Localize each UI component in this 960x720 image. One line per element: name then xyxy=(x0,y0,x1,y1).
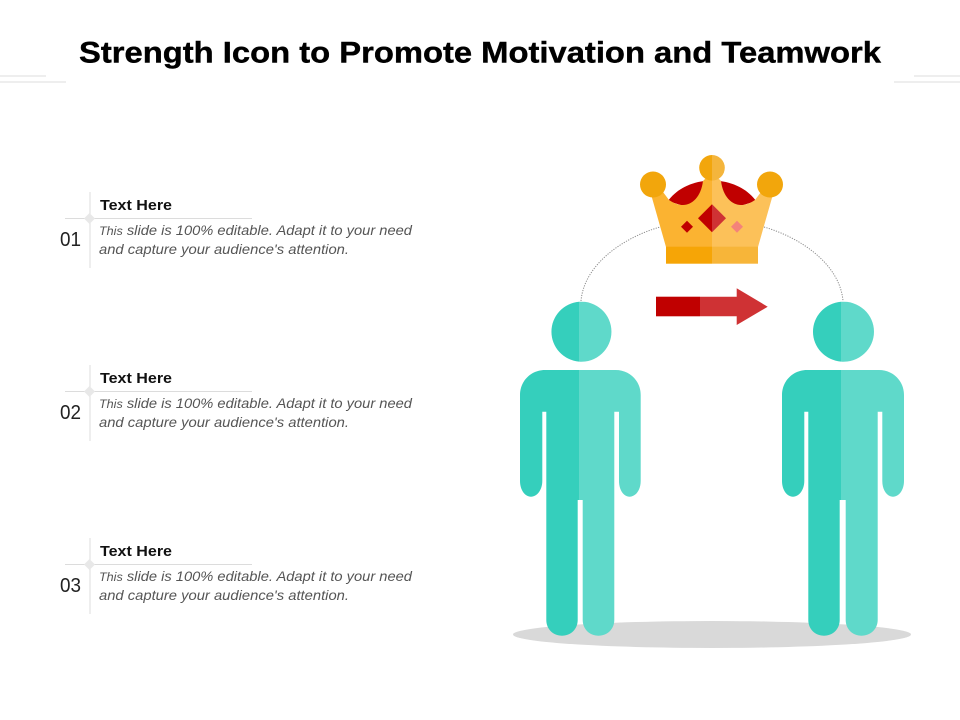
number 03: 03 xyxy=(60,575,81,597)
description 03: This slide is 100% editable. Adapt it to your need xyxy=(99,568,413,584)
heading 03: Text Here xyxy=(100,544,172,560)
person right xyxy=(782,302,904,636)
description 02: This slide is 100% editable. Adapt it to your need xyxy=(99,395,413,411)
heading 01: Text Here xyxy=(100,198,172,214)
number 01: 01 xyxy=(60,229,81,251)
icon: crown xyxy=(640,155,783,264)
crown left half xyxy=(652,172,712,247)
description 01 xyxy=(99,222,413,257)
description 03: and capture your audience's attention. xyxy=(99,587,349,603)
heading 02: Text Here xyxy=(100,371,172,387)
number 02: 02 xyxy=(60,402,81,424)
list item 02 xyxy=(60,365,413,441)
list item 01 xyxy=(60,192,413,268)
crown right half xyxy=(712,172,772,247)
dotted arc between people xyxy=(581,227,843,301)
list item 03 xyxy=(60,538,413,614)
crown band xyxy=(666,247,758,264)
ground shadow xyxy=(513,621,911,648)
title: Strength Icon to Promote Motivation and Teamwork xyxy=(79,36,881,70)
description 02 xyxy=(99,395,413,430)
arrow xyxy=(656,288,768,325)
description 01: This slide is 100% editable. Adapt it to your need xyxy=(99,222,413,238)
person right: light half xyxy=(841,302,904,636)
person left: light half xyxy=(579,302,641,636)
person left xyxy=(520,302,641,636)
person left: dark half xyxy=(520,302,579,636)
crown red dome xyxy=(668,181,756,215)
description 02: and capture your audience's attention. xyxy=(99,414,349,430)
crown balls xyxy=(640,155,783,198)
crown jewels xyxy=(681,204,743,233)
description 01: and capture your audience's attention. xyxy=(99,241,349,257)
description 03 xyxy=(99,568,413,603)
person right: dark half xyxy=(782,302,841,636)
